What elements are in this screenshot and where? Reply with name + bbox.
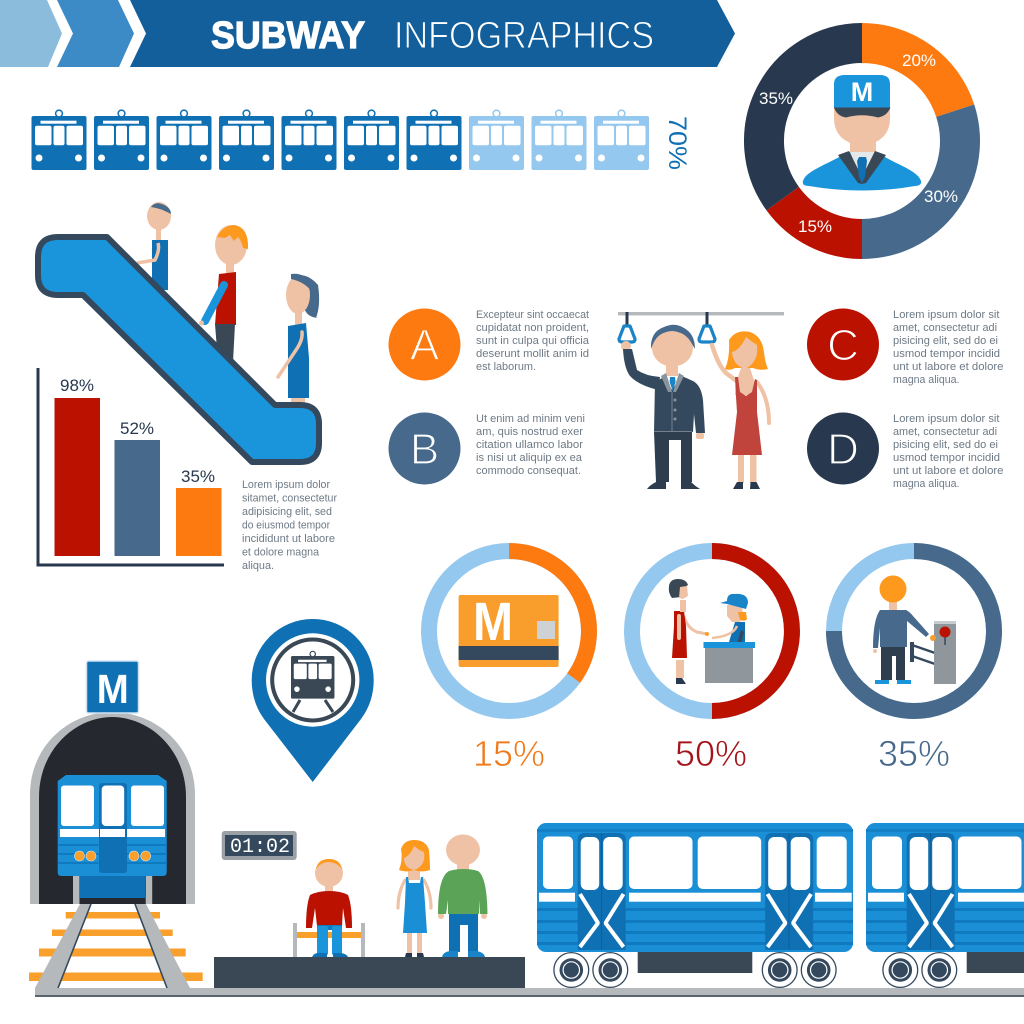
icon: subway worker: M <box>851 77 873 107</box>
standing man <box>438 834 488 957</box>
text block: chart note: aliqua. <box>242 560 274 572</box>
text block B <box>476 413 585 477</box>
passenger 1 <box>137 202 171 290</box>
50%: 50% <box>675 733 747 774</box>
title: SUBWAY <box>211 15 365 57</box>
bar chart: 98% <box>60 376 94 395</box>
text block: chart note: sitamet, consectetur <box>242 492 337 504</box>
donut chart: staff: 20% <box>902 51 936 70</box>
ring chart: ticket office 50% <box>632 551 792 774</box>
badge C <box>807 308 879 380</box>
ground rail <box>35 988 1024 997</box>
donut chart: staff <box>759 43 960 239</box>
header banner <box>0 0 735 67</box>
passenger 2 <box>199 225 248 362</box>
subway car 1 <box>537 823 853 987</box>
seated passenger on bench <box>293 859 365 957</box>
text block A: est laborum. <box>476 361 536 373</box>
station clock <box>222 831 297 860</box>
track ties <box>29 912 203 981</box>
text block C: Lorem ipsum dolor sit <box>893 309 1000 321</box>
icon: passenger at turnstile <box>873 576 956 684</box>
metro sign <box>86 661 138 713</box>
text block B: Ut enim ad minim veni <box>476 413 585 425</box>
15%: 15% <box>473 733 545 774</box>
text block D: unt ut labore et dolore <box>893 465 1004 477</box>
text block A: Excepteur sint occaecat <box>476 309 589 321</box>
standing commuters <box>618 312 784 489</box>
donut chart: staff: 30% <box>924 187 958 206</box>
text block D: magna aliqua. <box>893 478 960 490</box>
icon: subway worker <box>803 75 921 190</box>
text block C: usmod tempor incidid <box>893 348 1000 360</box>
ring chart: turnstile 35% <box>834 551 994 774</box>
text block B: am, quis nostrud exer <box>476 426 583 438</box>
track rails <box>35 904 190 988</box>
text block D: usmod tempor incidid <box>893 452 1000 464</box>
bar chart: 52% <box>120 419 154 438</box>
donut chart: staff: 35% <box>759 89 793 108</box>
icon: metro card: M <box>473 592 513 652</box>
station tunnel <box>30 661 195 904</box>
standing woman <box>398 840 431 957</box>
title: INFOGRAPHICS <box>394 15 654 57</box>
text block B: commodo consequat. <box>476 465 581 477</box>
text block C: amet, consectetur adi <box>893 322 997 334</box>
badge B: B <box>410 425 439 474</box>
text block: chart note: et dolore magna <box>242 546 320 558</box>
text block C: magna aliqua. <box>893 374 960 386</box>
text block D: pisicing elit, sed do ei <box>893 439 998 451</box>
train front <box>58 775 167 904</box>
35%: 35% <box>878 733 950 774</box>
map pin with subway icon <box>252 619 374 782</box>
text block D: amet, consectetur adi <box>893 426 997 438</box>
passenger 3 <box>278 274 319 404</box>
icon: buyer at ticket desk <box>669 579 755 684</box>
bar chart <box>38 368 224 565</box>
badge D: D <box>827 425 859 474</box>
woman in red dress <box>712 331 769 489</box>
station platform <box>214 957 525 988</box>
handrail with straps <box>618 312 784 342</box>
bench <box>293 923 365 957</box>
text block D: Lorem ipsum dolor sit <box>893 413 1000 425</box>
text block: chart note <box>242 479 337 572</box>
text block B: is nisi ut aliquip ex ea <box>476 452 583 464</box>
subway car 2 <box>866 823 1024 987</box>
text block D <box>893 413 1004 490</box>
badge A <box>388 308 460 380</box>
icon: metro card <box>459 592 559 667</box>
badge A: A <box>410 321 440 370</box>
text block: chart note: Lorem ipsum dolor <box>242 479 330 491</box>
metro sign: M <box>97 666 129 712</box>
text block C: unt ut labore et dolore <box>893 361 1004 373</box>
train icon row 70% <box>32 110 691 170</box>
station clock: 01:02 <box>230 836 290 859</box>
text block: chart note: do eiusmod tempor <box>242 520 330 532</box>
title <box>211 15 654 57</box>
text block C <box>893 309 1004 386</box>
man in suit <box>621 325 705 489</box>
text block A: deserunt mollit anim id <box>476 348 589 360</box>
ring chart: card 15% <box>429 551 589 774</box>
donut chart: staff: 15% <box>798 217 832 236</box>
text block A: cupidatat non proident, <box>476 322 589 334</box>
icon: train <box>291 651 334 712</box>
text block B: citation ullamco labor <box>476 439 583 451</box>
text block: chart note: incididunt ut labore <box>242 533 335 545</box>
badge D <box>807 412 879 484</box>
70% label: 70% <box>663 116 691 170</box>
badge B <box>388 412 460 484</box>
escalator with passengers <box>38 202 319 462</box>
text block C: pisicing elit, sed do ei <box>893 335 998 347</box>
bar chart: 35% <box>181 467 215 486</box>
text block A <box>476 309 590 373</box>
text block A: sunt in culpa qui officia <box>476 335 590 347</box>
badge C: C <box>827 321 859 370</box>
escalator body <box>38 237 319 462</box>
text block: chart note: adipisicing elit, sed <box>242 506 332 518</box>
